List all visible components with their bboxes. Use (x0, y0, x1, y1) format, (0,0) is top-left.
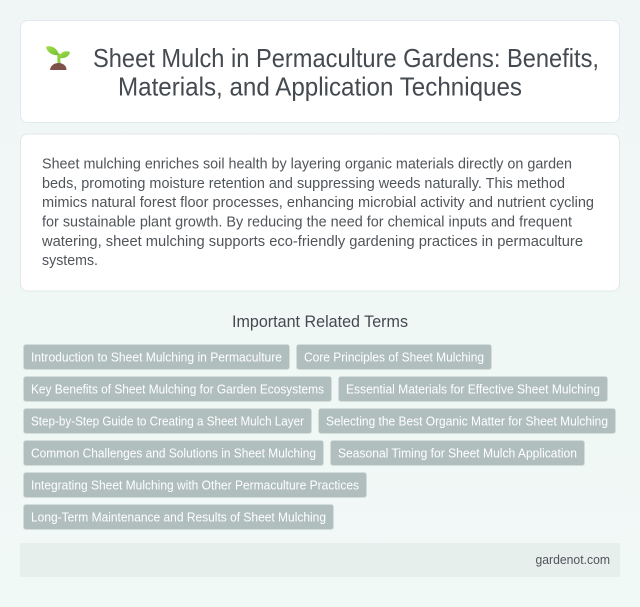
tag: selecting organic matter: Selecting the Best Organic Matter for Sheet Mulching (326, 413, 608, 428)
icon: seedling (46, 46, 70, 70)
tag: common challenges: Common Challenges and Solutions in Sheet Mulching (31, 445, 316, 460)
tag: core principles: Core Principles of Sheet Mulching (304, 349, 484, 364)
tag: key benefits (24, 376, 332, 402)
tag: step-by-step guide: Step-by-Step Guide to Creating a Sheet Mulch Layer (31, 413, 305, 428)
tag: seasonal timing (330, 440, 584, 466)
description paragraph: Sheet mulching enriches soil health by layering organic materials directly on garden (42, 156, 572, 172)
tag: step-by-step guide (24, 408, 312, 434)
description paragraph: beds, promoting moisture retention and suppressing weeds naturally. This method (42, 175, 565, 192)
description paragraph: for sustainable plant growth. By reducing the need for chemical inputs and frequent (42, 214, 573, 231)
tag cloud (24, 344, 616, 530)
description paragraph: watering, sheet mulching supports eco-friendly gardening practices in permaculture (41, 233, 583, 250)
tag: introduction: Introduction to Sheet Mulching in Permaculture (31, 349, 282, 364)
tag: integrating practices (24, 472, 366, 498)
tag: key benefits: Key Benefits of Sheet Mulching for Garden Ecosystems (31, 381, 324, 396)
tag: introduction (24, 344, 290, 370)
tag: essential materials: Essential Materials for Effective Sheet Mulching (346, 381, 600, 396)
tag: integrating practices: Integrating Sheet Mulching with Other Permaculture Practices (31, 477, 359, 492)
title line 1: Sheet Mulch in Permaculture Gardens: Benefits, (93, 43, 599, 73)
tag: long-term maintenance (24, 504, 334, 530)
footer source text: gardenot.com (536, 553, 610, 567)
tag: long-term maintenance: Long-Term Maintenance and Results of Sheet Mulching (31, 509, 326, 524)
tag: common challenges (24, 440, 324, 466)
title line 2: Materials, and Application Techniques (118, 72, 522, 102)
tag: core principles (296, 344, 492, 370)
tag: seasonal timing: Seasonal Timing for Sheet Mulch Application (338, 445, 577, 460)
footer (20, 543, 620, 577)
description paragraph: systems. (42, 252, 98, 269)
tag: essential materials (338, 376, 608, 402)
panel: description (20, 134, 620, 291)
heading: important related terms: Important Related Terms (232, 313, 408, 331)
tag: selecting organic matter (318, 408, 616, 434)
description paragraph: mimics natural forest floor processes, enhancing microbial activity and nutrient cycling (42, 194, 594, 211)
panel: title header (20, 20, 620, 122)
description paragraph (41, 156, 594, 269)
